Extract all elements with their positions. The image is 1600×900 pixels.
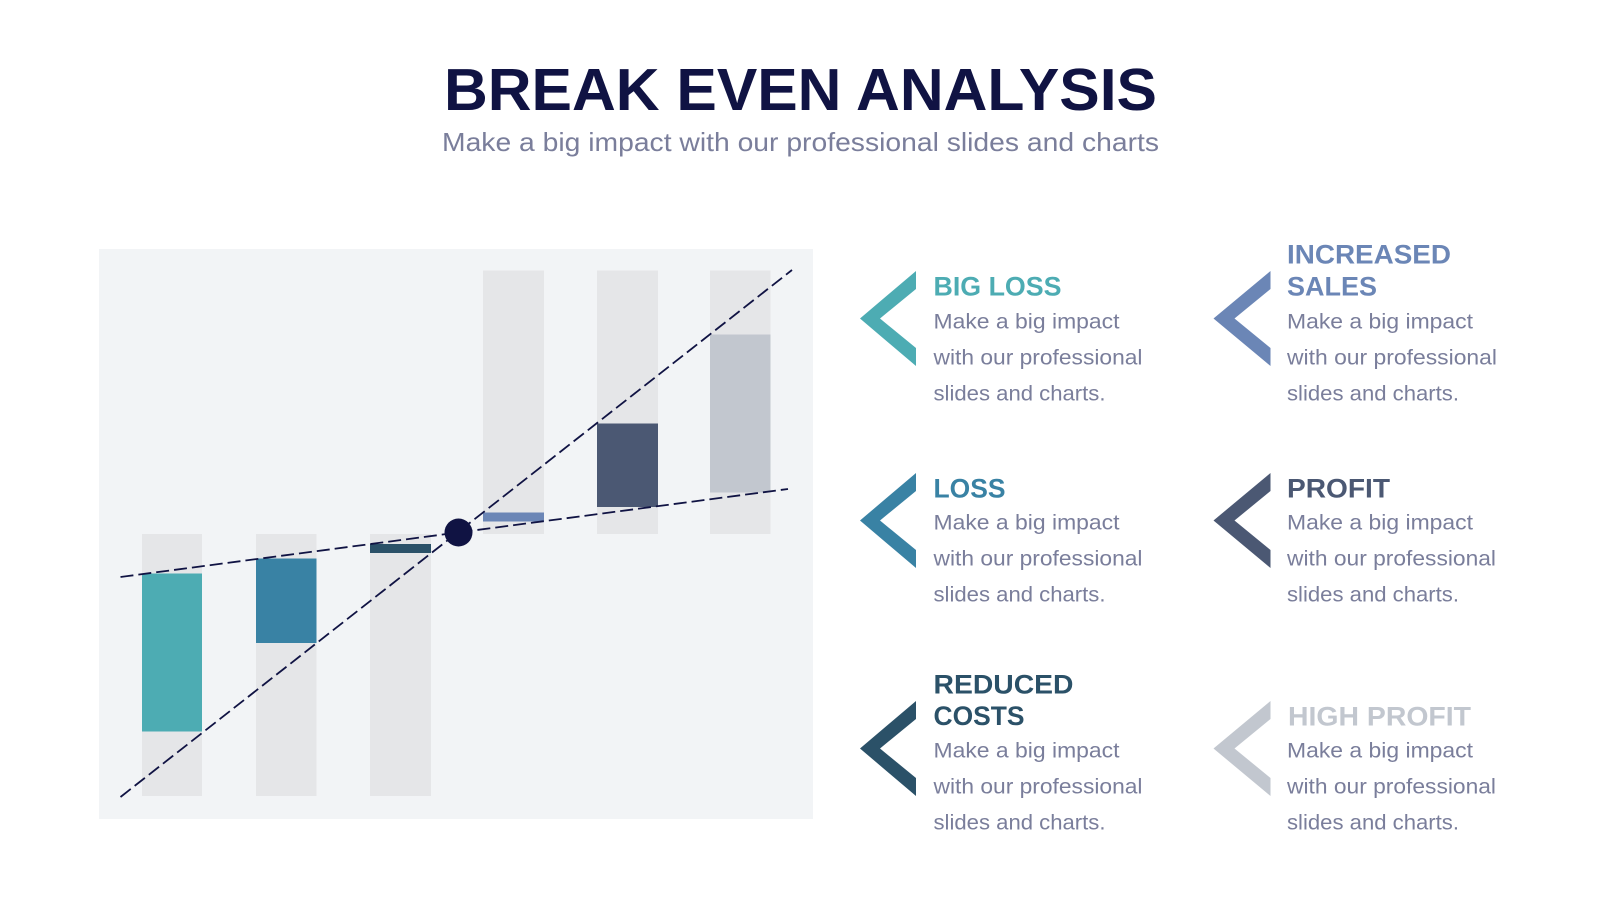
icon: chevron [860, 701, 916, 796]
bar track 2 [256, 534, 316, 796]
heading: HIGH PROFIT [1288, 702, 1472, 732]
bar: big loss [142, 574, 202, 732]
text block: slides and charts. [1287, 812, 1459, 834]
icon: chevron [1214, 473, 1270, 568]
bar: reduced costs [370, 544, 431, 553]
title: BREAK EVEN ANALYSIS [444, 57, 1157, 123]
line: revenue trend [120, 270, 792, 797]
text block: Make a big impact [934, 512, 1120, 534]
text block: slides and charts. [1287, 382, 1459, 406]
text block: with our professional [1286, 776, 1496, 798]
bar: high profit [710, 334, 770, 492]
bar: increased sales [483, 512, 544, 522]
line: fixed cost trend [120, 489, 788, 577]
text block: Make a big impact [1287, 310, 1473, 334]
heading: BIG LOSS [934, 272, 1062, 302]
heading: LOSS [934, 474, 1006, 504]
heading: COSTS [934, 701, 1024, 731]
text block: with our professional [932, 346, 1142, 370]
text block: Make a big impact [934, 740, 1120, 762]
icon: chevron [1214, 701, 1270, 796]
bar track 1 [142, 534, 202, 796]
text block: Make a big impact [1287, 740, 1473, 762]
icon: chevron [1214, 271, 1270, 366]
text block: with our professional [932, 548, 1142, 570]
item: big loss [860, 271, 1142, 406]
text block: with our professional [1286, 346, 1497, 370]
text block: slides and charts. [934, 812, 1106, 834]
bar track 4 [483, 270, 544, 534]
text block: slides and charts. [934, 584, 1106, 606]
bar track 3 [370, 534, 431, 796]
text block: Make a big impact [934, 310, 1120, 334]
heading: PROFIT [1287, 474, 1391, 504]
bar: loss [256, 558, 316, 643]
break even point [444, 518, 472, 546]
icon: chevron [860, 473, 916, 568]
heading: INCREASED [1287, 240, 1451, 270]
icon: chevron [860, 271, 916, 366]
text block: slides and charts. [1287, 584, 1459, 606]
bar track 5 [597, 270, 658, 534]
bar: profit [597, 424, 658, 507]
item: reduced costs [860, 670, 1142, 834]
item: high profit [1214, 701, 1496, 834]
item: loss [860, 473, 1142, 606]
heading: REDUCED [934, 670, 1074, 700]
text block: slides and charts. [934, 382, 1106, 406]
panel: break even chart [99, 249, 813, 819]
subtitle: Make a big impact with our professional slides and charts [442, 127, 1159, 157]
item: increased sales [1214, 240, 1497, 406]
text block: Make a big impact [1287, 512, 1473, 534]
bar track 6 [710, 270, 770, 534]
heading: SALES [1287, 272, 1377, 302]
text block: with our professional [932, 776, 1142, 798]
text block: with our professional [1286, 548, 1496, 570]
item: profit [1214, 473, 1496, 606]
